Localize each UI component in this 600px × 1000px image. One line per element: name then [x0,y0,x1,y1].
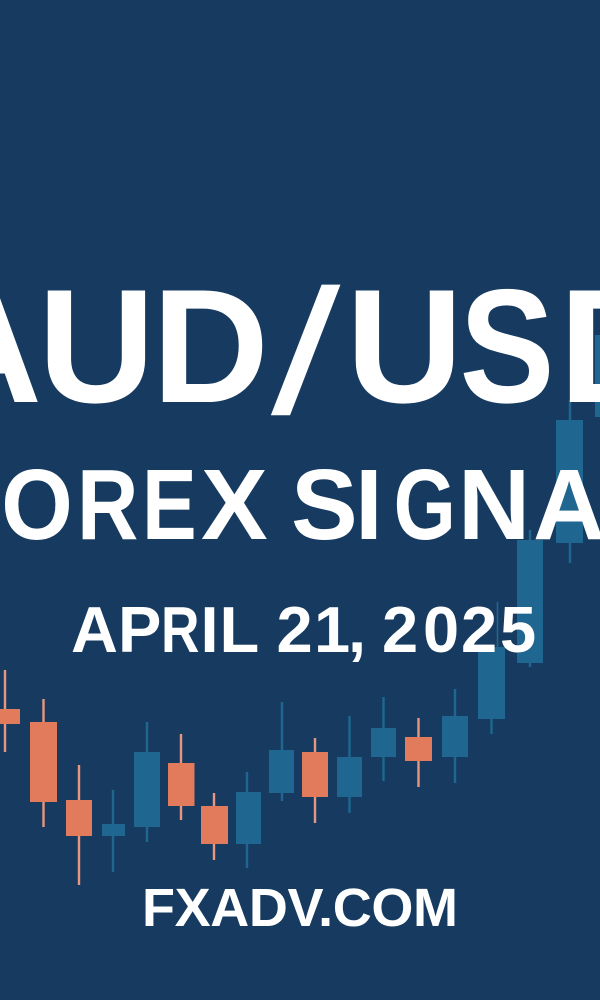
title: AUD/USD: / [262,254,349,450]
candlestick chart [0,300,600,885]
subtitle: FOREX SIGNAL: O [1,449,73,561]
website: FXADV.COM [142,878,458,938]
subtitle: FOREX SIGNAL: E [142,449,197,561]
subtitle: FOREX SIGNAL: G [394,450,456,561]
title: AUD/USD: S [460,257,555,437]
title: AUD/USD [0,254,600,450]
title: AUD/USD: U [346,256,463,437]
date: R [161,593,199,666]
subtitle: FOREX SIGNAL: R [77,448,138,561]
date: IL 21, 2025 [200,593,536,666]
subtitle: FOREX SIGNAL: X SI [201,449,383,561]
subtitle: FOREX SIGNAL [1,448,600,561]
date: AP [71,593,161,666]
